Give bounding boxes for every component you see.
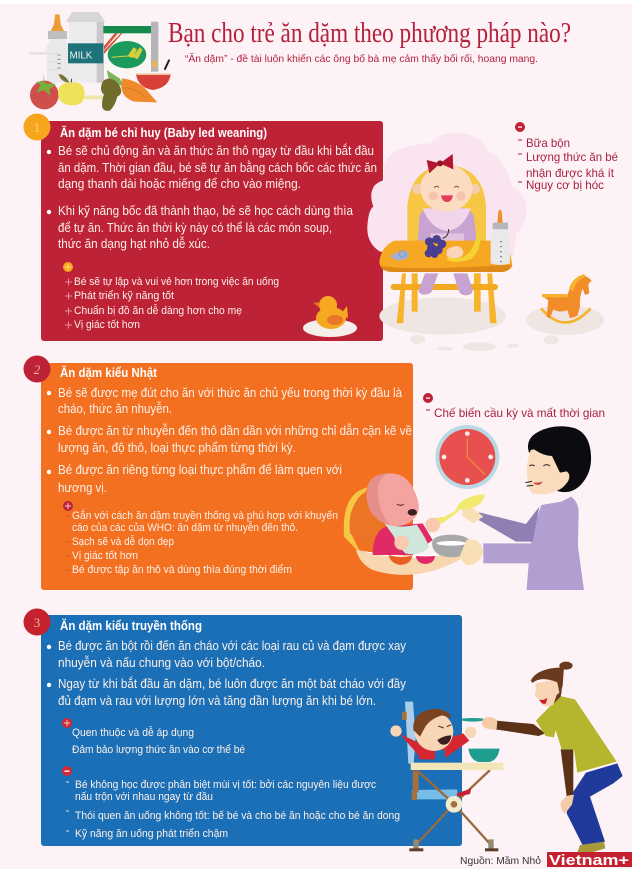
icon: minus [423, 393, 433, 403]
pros list: cáo của các của WHO: ăn dặm từ nhuyễn đến thô. [72, 521, 298, 534]
bullet paragraph 2: đủ đạm và rau với lượng lớn và tăng dần lượng ăn khi bé lớn. [58, 693, 376, 708]
cons list: Bé không học được phân biệt mùi vị tốt: bởi các nguyên liệu được [75, 779, 376, 791]
panel: red background [41, 121, 383, 341]
pros list [65, 276, 279, 331]
pros list: Bé sẽ tự lập và vui vẻ hơn trong việc ăn uống [74, 276, 279, 288]
side list: cons of method 1: Bữa bộn [526, 136, 570, 150]
side list: cons of method 1 [515, 122, 618, 192]
bullet paragraph 1: dạng thanh dài hoặc miếng để cho vào miệng. [58, 176, 301, 191]
panel 1 text [47, 125, 377, 331]
pros list: Bé được tập ăn thô và dùng thìa đúng thời điểm [72, 564, 292, 576]
bullet paragraph 2: Ngay từ khi bắt đầu ăn dặm, bé luôn được ăn một bát cháo với đầy [58, 676, 406, 691]
bullet paragraph 2: thức ăn dạng hạt nhỏ dễ xúc. [58, 236, 210, 251]
cons list: Kỹ năng ăn uống phát triển chậm [75, 828, 228, 840]
heading: baby led weaning: Ăn dặm bé chỉ huy (Baby led weaning) [60, 125, 267, 140]
panel: orange background [41, 363, 413, 590]
panel 3 badge [24, 608, 50, 636]
side list: cons of method 2 [423, 393, 605, 420]
icon: duck [303, 296, 357, 337]
bullet paragraph 1: Bé được ăn bột rồi đến ăn cháo với các loại rau củ và đạm được xay [58, 638, 406, 653]
bullet paragraph 2: lượng ăn, độ thô, loại thực phẩm từng thời kỳ. [58, 440, 296, 455]
bullet paragraph 1 [47, 638, 406, 670]
pros list [65, 509, 338, 576]
icon: food illustration: MILK [70, 51, 93, 62]
side list: cons of method 2: Chế biến cầu kỳ và mất thời gian [434, 406, 605, 420]
side list: cons of method 1: nhận được khá ít [526, 166, 615, 180]
side list: cons of method 1: Lượng thức ăn bé [526, 150, 618, 164]
panel: blue background [41, 615, 462, 846]
illustration: baby in high chair with toys [367, 133, 604, 351]
pros list [72, 726, 245, 756]
pros list: Quen thuộc và dễ áp dụng [72, 726, 194, 739]
icon: plus [63, 262, 73, 272]
bullet paragraph 2: Khi kỹ năng bốc đã thành thạo, bé sẽ học cách dùng thìa [58, 203, 354, 218]
icon: plus [63, 501, 73, 511]
heading: traditional style: Ăn dặm kiểu truyền thống [60, 618, 202, 633]
illustration: mother feeding baby [344, 425, 591, 590]
logo: Vietnam+: Vietnam+ [549, 853, 629, 869]
panel 1 badge: 1 [34, 120, 40, 135]
side list: cons of method 1: Nguy cơ bị hóc [526, 178, 604, 192]
pros list: Chuẩn bị đồ ăn dễ dàng hơn cho mẹ [74, 304, 242, 317]
cons list [66, 779, 400, 840]
panel 2 text [47, 365, 412, 576]
bullet paragraph 1: cháo, thức ăn nhuyễn. [58, 401, 172, 416]
bullet paragraph 1: ăn dặm. Thời gian đầu, bé sẽ tự ăn bằng cách bốc các thức ăn [58, 160, 377, 175]
bullet paragraph 3 [47, 462, 342, 495]
bullet paragraph 2: Bé được ăn từ nhuyễn đến thô dần dần với những chỉ dẫn cặn kẽ về [58, 423, 412, 438]
panel 2 badge: 2 [34, 362, 41, 377]
bullet paragraph 2 [47, 203, 354, 251]
icon: minus [515, 122, 525, 132]
bullet paragraph 1 [47, 385, 403, 416]
pros list: Sạch sẽ và dễ dọn dẹp [72, 535, 174, 548]
illustration: father feeding baby [390, 662, 623, 852]
bullet paragraph 1: nhuyễn và nấu chung vào với bột/cháo. [58, 655, 265, 670]
bullet paragraph 2: để tự ăn. Thức ăn thời kỳ này có thể là các món soup, [58, 220, 332, 235]
pros list: Phát triển kỹ năng tốt [74, 290, 174, 302]
heading: Japanese style: Ăn dặm kiểu Nhật [60, 365, 158, 380]
subtitle: “Ăn dặm” - đề tài luôn khiến các ông bố bà mẹ cảm thấy bối rối, hoang mang. [185, 52, 538, 65]
icon: food illustration [29, 12, 171, 111]
icon: minus [62, 766, 72, 776]
pros list: Vị giác tốt hơn [72, 550, 138, 562]
pros list: Gắn với cách ăn dặm truyền thống và phù hợp với khuyến [72, 509, 338, 522]
panel 3 badge: 3 [34, 615, 40, 630]
pros list: Vị giác tốt hơn [74, 319, 140, 331]
panel 2 badge [24, 356, 50, 382]
bullet paragraph 1: Bé sẽ chủ động ăn và ăn thức ăn thô ngay từ đầu khi bắt đầu [58, 143, 374, 158]
bullet paragraph 2 [47, 423, 412, 455]
bullet paragraph 3: Bé được ăn riêng từng loại thực phẩm để làm quen với [58, 462, 342, 477]
bullet paragraph 3: hương vị. [58, 480, 107, 495]
bullet paragraph 1 [47, 143, 377, 191]
pros list: Đảm bảo lượng thức ăn vào cơ thể bé [72, 744, 245, 756]
panel 3 text [47, 618, 406, 840]
source credit: Nguồn: Mầm Nhỏ [460, 855, 541, 867]
icon: plus [62, 718, 72, 728]
bullet paragraph 1: Bé sẽ được mẹ đút cho ăn với thức ăn chủ yếu trong thời kỳ đầu là [58, 385, 403, 400]
bullet paragraph 2 [47, 676, 406, 708]
cons list: Thói quen ăn uống không tốt: bế bé và cho bé ăn hoặc cho bé ăn dong [75, 810, 400, 822]
panel 1 badge [24, 114, 50, 140]
cons list: nấu trộn với nhau ngay từ đầu [75, 791, 213, 803]
